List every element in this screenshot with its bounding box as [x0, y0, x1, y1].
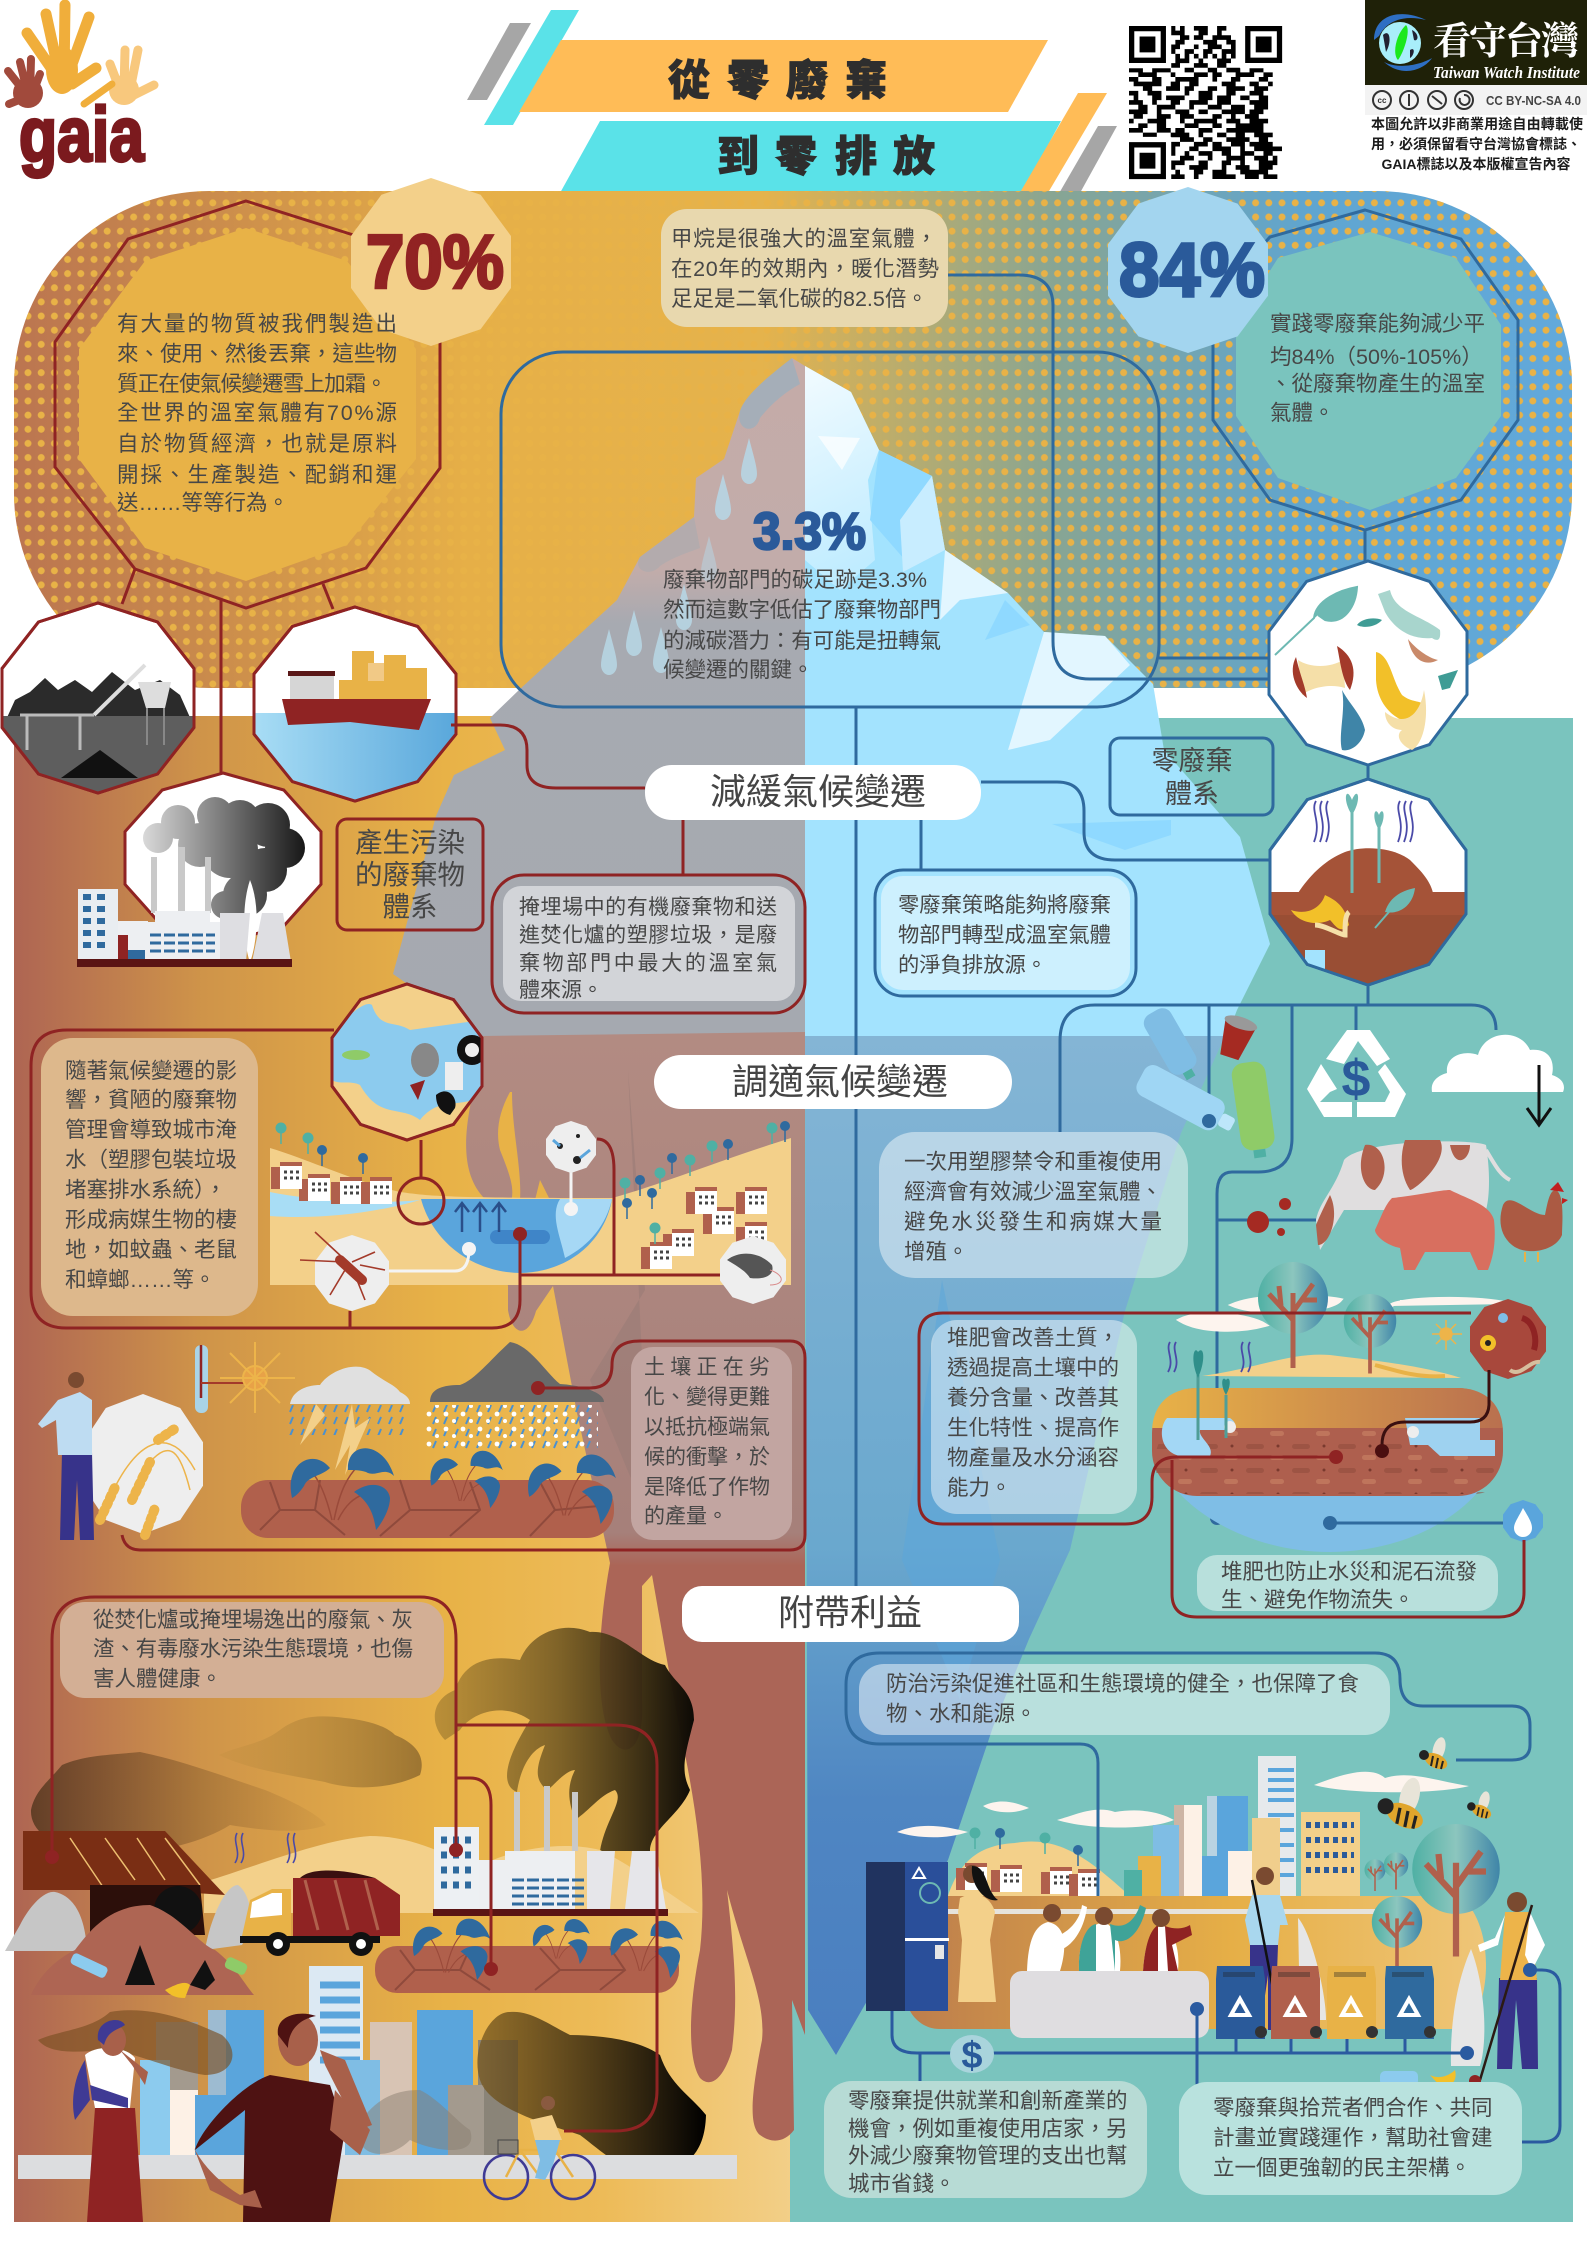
connector network: community [892, 1963, 1560, 2142]
callout: urban flooding [31, 1030, 520, 1328]
text: waste sector footprint: 然而這數字低估了廢棄物部門 [663, 598, 941, 622]
callout: zero waste strategy: 的淨負排放源。 [898, 953, 1047, 977]
text: material economy: 來、使用、然後丟棄，這些物 [117, 342, 397, 366]
fish [1341, 690, 1365, 750]
callout: soil degradation: 化、變得更難 [644, 1386, 770, 1409]
callout: zero waste strategy [875, 870, 1136, 996]
scene: compost soil [1152, 1262, 1510, 1552]
man [195, 2075, 345, 2222]
logo: Taiwan Watch Institute [1365, 0, 1587, 85]
icon: dollar: $ [961, 2035, 983, 2077]
panel: lower left background [14, 716, 814, 2222]
text: 84 percent: 、從廢棄物產生的溫室 [1270, 372, 1485, 396]
callout: compost: 透過提高土壤中的 [947, 1356, 1119, 1380]
license block: CC BY-NC-SA 4.0 [1486, 94, 1581, 108]
bins [1216, 1966, 1267, 2039]
smoke clouds [219, 1716, 422, 1787]
callout ring [398, 1178, 444, 1224]
callout: zero waste strategy: 零廢棄策略能夠將廢棄 [898, 893, 1111, 917]
cleaner 2 [1497, 1978, 1538, 2069]
icon: mosquito [546, 1121, 596, 1173]
label: zero waste system: 體系 [1165, 779, 1219, 809]
scene: extreme weather farm [38, 1342, 616, 1540]
heading: co-benefits [682, 1584, 1019, 1642]
scene: flood city [270, 1121, 791, 1285]
text: waste sector footprint [663, 568, 941, 682]
text: material economy: 全世界的溫室氣體有70%源 [117, 401, 397, 425]
icon: plastic bottles and cup [1133, 1005, 1277, 1525]
title banner [467, 10, 1117, 208]
sun [1432, 1320, 1462, 1350]
woman at machine [958, 1894, 996, 2002]
callout: pollution prevention [846, 1653, 1530, 1896]
callout: waste pickers: 立一個更強韌的民主架構。 [1213, 2156, 1471, 2180]
badge: 70%: 70% [366, 220, 504, 305]
callout: urban flooding: 水（塑膠包裝垃圾 [65, 1148, 237, 1172]
callout: urban flooding: 管理會導致城市淹 [65, 1118, 237, 1142]
text: material economy: 質正在使氣候變遷雪上加霜。 [117, 372, 387, 396]
cyclist [484, 2155, 595, 2199]
icon: recycling dollar: $ [1342, 1050, 1371, 1108]
callout: waste pickers [1179, 2082, 1522, 2195]
landfill slope [23, 1831, 225, 1895]
hill [204, 1836, 699, 1913]
dark cloud [430, 1342, 604, 1402]
callout: soil degradation [122, 1341, 805, 1550]
veg [1378, 590, 1440, 640]
buildings [1258, 1756, 1296, 1896]
callout: toxic release: 渣、有毒廢水污染生態環境，也傷 [93, 1637, 413, 1661]
text: material economy: 自於物質經濟，也就是原料 [117, 432, 397, 456]
callout: flood prevention [1172, 1460, 1524, 1617]
callout: toxic release: 從焚化爐或掩埋場逸出的廢氣、灰 [93, 1608, 413, 1632]
callout: methane: 甲烷是很強大的溫室氣體， [671, 227, 937, 251]
callout: soil degradation: 的產量。 [644, 1505, 728, 1528]
license block: 本圖允許以非商業用途自由轉載使 [1371, 116, 1583, 132]
callout: landfill: 體來源。 [519, 979, 603, 1002]
callout: plastic ban: 避免水災發生和病媒大量 [904, 1210, 1162, 1234]
label: pollution system: 產生污染 [355, 827, 465, 858]
text: material economy: 開採、生產製造、配銷和運 [117, 463, 397, 487]
panel: lower right background [790, 718, 1573, 2222]
table and panelists [1027, 1922, 1178, 1971]
lower smoke [477, 2012, 706, 2175]
text: waste sector footprint: 候變遷的關鍵。 [663, 658, 814, 682]
connector lines: methane and 3.3% [948, 275, 1270, 679]
label: pollution system: 體系 [382, 891, 438, 922]
panel: right decagon [1213, 210, 1518, 565]
sun [220, 1342, 295, 1413]
callout: methane: 在20年的效期內，暖化潛勢 [671, 257, 939, 281]
text: material economy: 有大量的物質被我們製造出 [117, 312, 397, 336]
thermometer [195, 1345, 208, 1413]
icon: cockroach [300, 1232, 389, 1311]
callout: urban flooding: 響，貧陋的廢棄物 [65, 1088, 237, 1112]
callout: soil degradation: 以抵抗極端氣 [644, 1416, 770, 1439]
icon: food waste [1269, 561, 1467, 765]
label: pollution system: 的廢棄物 [355, 859, 465, 890]
license block: 用，必須保留看守台灣協會標誌、 [1371, 136, 1581, 152]
callout: compost [919, 1313, 1471, 1524]
icon: coal mine [0, 603, 196, 800]
callout: jobs: 零廢棄提供就業和創新產業的 [848, 2089, 1128, 2113]
heading: mitigation [451, 725, 1270, 875]
truck [293, 1878, 400, 1936]
callout: compost: 能力。 [947, 1476, 1012, 1500]
connector: food waste to compost [1366, 765, 1370, 780]
callout: landfill: 掩埋場中的有機廢棄物和送 [519, 896, 777, 919]
callout: plastic ban: 一次用塑膠禁令和重複使用 [904, 1150, 1162, 1174]
iceberg: left underwater [466, 1032, 805, 2141]
callout: methane: 足足是二氧化碳的82.5倍。 [671, 287, 928, 311]
iceberg [393, 358, 1270, 2141]
license block: GAIA標誌以及本版權宣告內容 [1382, 156, 1570, 172]
callout: compost: 生化特性、提高作 [947, 1416, 1119, 1440]
bees [1419, 1736, 1450, 1772]
logo: Taiwan Watch Institute: 看守台灣 [1433, 10, 1580, 65]
callout: jobs: 城市省錢。 [848, 2172, 956, 2196]
callout: zero waste strategy: 物部門轉型成溫室氣體 [898, 923, 1111, 947]
plants [1198, 1375, 1226, 1440]
callout: landfill [492, 875, 805, 1013]
callout: urban flooding: 隨著氣候變遷的影 [65, 1059, 237, 1083]
icon: flooded trash [332, 984, 487, 1140]
connector: flood icon [420, 1140, 422, 1178]
houses left [299, 1174, 330, 1201]
license block: cc [1378, 96, 1387, 105]
callout: urban flooding: 地，如蚊蟲、老鼠 [65, 1238, 237, 1262]
waste pile [31, 1905, 254, 1995]
slice [1408, 639, 1438, 663]
man [60, 1452, 94, 1540]
callout: waste pickers: 計畫並實踐運作，幫助社會建 [1213, 2126, 1493, 2150]
callout: urban flooding: 堵塞排水系統）， [65, 1178, 226, 1202]
leaf [1275, 587, 1357, 655]
callout: soil degradation: 候的衝擊，於 [644, 1446, 770, 1469]
icon: cloud with down arrow [1432, 1035, 1564, 1125]
icon: compost [1270, 779, 1466, 987]
callout: landfill: 進焚化爐的塑膠垃圾，是廢 [519, 924, 777, 947]
text: 84 percent: 實踐零廢棄能夠減少平 [1270, 312, 1485, 336]
label: zero waste system: 零廢棄 [1152, 746, 1232, 776]
clouds [1180, 1297, 1510, 1330]
litter [1380, 2071, 1418, 2086]
text: waste sector footprint: 廢棄物部門的碳足跡是3.3% [663, 568, 927, 592]
label: pollution system [337, 819, 483, 930]
logo: gaia [8, 5, 154, 178]
icon: rat [720, 1236, 786, 1304]
storm cloud [290, 1367, 410, 1404]
logo: gaia: gaia [19, 92, 145, 178]
text: material economy [117, 312, 397, 515]
connector: soil organisms to water [1375, 1370, 1489, 1458]
scene: community [866, 1736, 1545, 2087]
icon: teardrops [601, 438, 757, 675]
callout: plastic ban: 經濟會有效減少溫室氣體、 [904, 1180, 1162, 1204]
callout: compost: 堆肥會改善土質， [947, 1326, 1119, 1350]
callout: flood prevention: 生、避免作物流失。 [1221, 1588, 1415, 1612]
clouds [897, 1772, 1469, 1837]
callout: jobs: 機會，例如重複使用店家，另 [848, 2117, 1128, 2141]
icon: livestock and virus [1247, 1140, 1568, 1270]
icon: dollar [950, 2035, 994, 2077]
trees [1412, 1824, 1500, 1956]
heading: adaptation [654, 1053, 1012, 1109]
connector: iceberg to lower levels [854, 707, 858, 1586]
text: 84 percent: 氣體。 [1270, 401, 1335, 425]
icon: water drop [1323, 1500, 1543, 1542]
badge: 70% [351, 178, 511, 346]
apple core [1298, 660, 1345, 695]
badge: 84%: 84% [1119, 228, 1265, 313]
road [18, 2155, 737, 2179]
heading: co-benefits: 附帶利益 [778, 1584, 922, 1636]
icon: soil organisms [1470, 1299, 1546, 1379]
callout: pollution prevention: 物、水和能源。 [886, 1702, 1037, 1726]
wheat circle [83, 1394, 203, 1534]
heading: mitigation: 減緩氣候變遷 [710, 763, 926, 815]
text: 84 percent [1270, 312, 1485, 425]
license block [1365, 85, 1587, 172]
QR code [1129, 26, 1282, 179]
line dots [520, 1139, 722, 1275]
callout: jobs [824, 2081, 1147, 2198]
connector network: adaptation [1060, 985, 1496, 1518]
callout: soil degradation: 是降低了作物 [644, 1476, 770, 1499]
badge: 84% [1108, 187, 1268, 353]
woman [87, 2108, 143, 2222]
callout: plastic ban [879, 1132, 1188, 1278]
scene: pollution landfill, factory and city [5, 1628, 737, 2222]
callout: landfill: 棄物部門中最大的溫室氣 [519, 952, 777, 975]
stat: 3.3%: 3.3% [753, 503, 866, 561]
cracked soil [241, 1480, 614, 1538]
hills [948, 1842, 1130, 1896]
panel: upper band (atmosphere) [14, 191, 1572, 688]
label: zero waste system [1110, 738, 1273, 815]
title line 1: 從零廢棄 [668, 47, 887, 108]
cleaner 1 [1245, 1895, 1288, 1945]
soil bar [375, 1946, 679, 1993]
icon: cargo ship [254, 607, 457, 803]
callout: waste pickers: 零廢棄與拾荒者們合作、共同 [1213, 2096, 1493, 2120]
title line 2: 到零排放 [717, 123, 935, 184]
city [309, 1966, 363, 2156]
heading: adaptation: 調適氣候變遷 [732, 1053, 948, 1105]
callout: urban flooding: 和蟑螂……等。 [65, 1268, 216, 1292]
trash bags [5, 1885, 250, 1951]
callout: methane [661, 209, 948, 327]
callout: jobs: 外減少廢棄物管理的支出也幫 [848, 2144, 1128, 2168]
callout: iceberg 3.3% [501, 352, 1159, 707]
callout: compost: 物產量及水分涵容 [947, 1446, 1119, 1470]
callout: compost: 養分含量、改善其 [947, 1386, 1119, 1410]
iceberg: right above water [805, 366, 1270, 1036]
callout: urban flooding: 形成病媒生物的棲 [65, 1208, 237, 1232]
text: material economy: 送……等等行為。 [117, 491, 289, 515]
factory [434, 1827, 479, 1911]
ground [910, 1896, 1486, 2029]
arrows [455, 1203, 506, 1232]
text: 84 percent: 均84%（50%-105%） [1270, 345, 1483, 369]
panel: left decagon [55, 201, 440, 774]
callout: toxic release [45, 1597, 657, 2131]
text: waste sector footprint: 的減碳潛力：有可能是扭轉氣 [663, 629, 941, 653]
icon: recycling dollar [1307, 1030, 1406, 1117]
callout: soil degradation: 土壤正在劣 [644, 1356, 770, 1379]
icon: factory smoke [77, 773, 321, 967]
recycling machine [866, 1862, 905, 2011]
iceberg: left above water [393, 358, 805, 1036]
callout: pollution prevention: 防治污染促進社區和生態環境的健全，也保障了食 [886, 1672, 1359, 1696]
callout: flood prevention: 堆肥也防止水災和泥石流發 [1221, 1560, 1477, 1584]
callout: toxic release: 害人體健康。 [93, 1667, 222, 1691]
banana [1376, 652, 1425, 723]
callout: plastic ban: 增殖。 [904, 1240, 969, 1264]
iceberg: right underwater [805, 1036, 1225, 2055]
